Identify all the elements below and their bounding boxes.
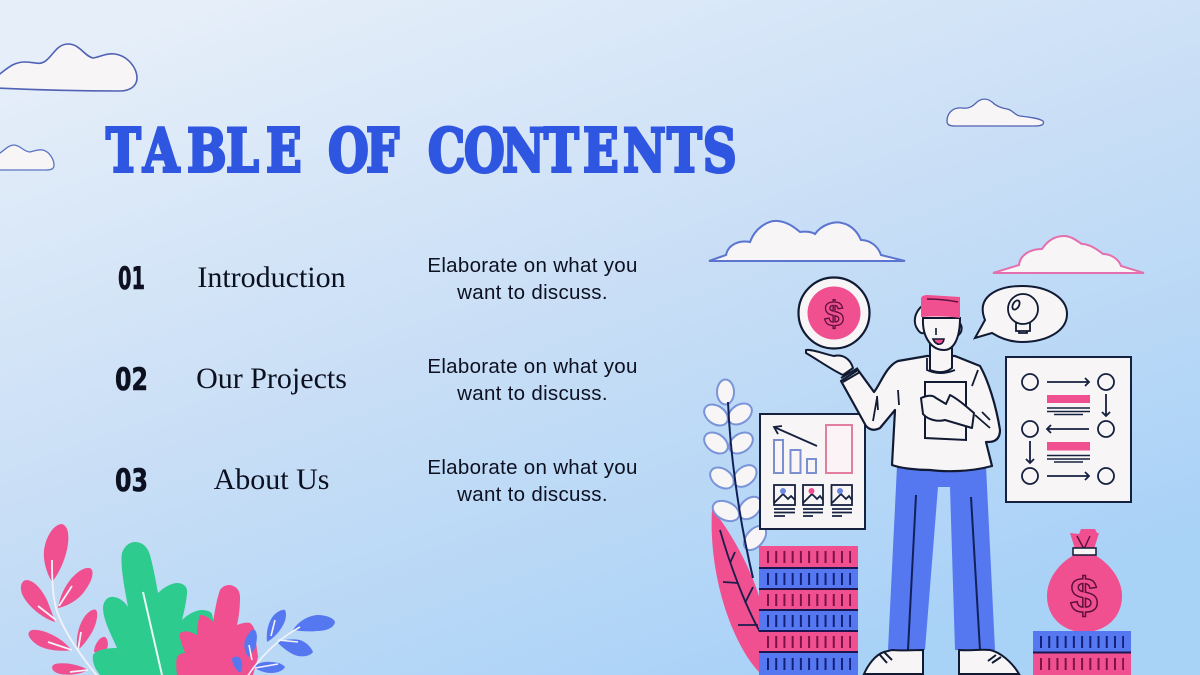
leaf veins [720,530,760,663]
coin ticks [767,557,851,664]
dollar coin [798,278,870,348]
cap [921,295,960,318]
contents row 2 [115,355,638,405]
hand with cuff [806,350,860,382]
pink leaf [712,509,762,675]
foliage bottom left [21,524,335,675]
cloud: top right [947,99,1043,126]
number 01: 01 [118,261,145,297]
trend arrow [774,426,817,446]
thumbnail suns [780,488,843,494]
trousers [888,466,995,650]
neck [930,340,952,372]
pink chart frame [826,425,852,473]
jacket details [873,358,990,428]
mouth and nose [933,328,944,344]
dollar sign: $ [1070,568,1098,624]
holding hand [921,395,974,428]
contents row 1 [118,254,638,304]
pink bars [1047,395,1090,450]
clipboard [925,382,966,440]
jacket [841,356,1000,471]
coin stack left [759,546,858,675]
bag body [1047,554,1122,632]
cap line [927,299,958,302]
coin layers [759,546,858,675]
plant with pink leaf [700,380,771,675]
heading: Introduction: Introduction [197,261,346,294]
cloud: left small [0,145,54,170]
left shoe [864,650,923,674]
right shoe [959,650,1019,674]
speech bubble with light bulb [975,286,1067,342]
description 1: Elaborate on what you [427,254,638,277]
pink branch [21,524,108,675]
heading: About Us: About Us [214,463,329,496]
number 02: 02 [115,362,148,398]
belt [928,442,954,460]
contents row 3 [115,456,638,506]
title: TABLE OF CONTENTS [106,115,737,186]
bag band [1073,548,1096,555]
pink flower [176,585,258,675]
description 2: want to discuss. [456,382,608,405]
dollar coin: $ [824,295,844,334]
blue bars [774,440,816,473]
description 1: want to discuss. [456,281,608,304]
image thumbnails [774,485,852,516]
cloud: blue outlined [709,221,905,261]
blue branch [232,610,335,675]
heading: Our Projects: Our Projects [196,362,347,395]
text lines [1047,408,1090,462]
description 3: want to discuss. [456,483,608,506]
face [923,318,960,350]
description 2: Elaborate on what you [427,355,638,378]
person [806,295,1019,674]
flow diagram board [1006,357,1131,502]
bag top [1070,529,1099,549]
board background [1006,357,1131,502]
green leaf [93,542,225,675]
coins under bag [1033,631,1131,675]
money bag on coins [1033,529,1131,675]
cloud: pink outlined [993,236,1144,273]
cloud: top left large [0,44,137,91]
flow arrows [1026,378,1110,480]
number 03: 03 [115,463,148,499]
chart board [760,414,865,529]
bag ties [1077,536,1090,549]
trouser creases [908,495,980,650]
description 3: Elaborate on what you [427,456,638,479]
plant leaves [700,380,771,554]
hair [915,306,962,337]
board background [760,414,865,529]
coin separators [759,568,858,652]
plant stem [728,402,753,578]
bulb [1008,294,1038,333]
flow nodes [1022,374,1114,484]
